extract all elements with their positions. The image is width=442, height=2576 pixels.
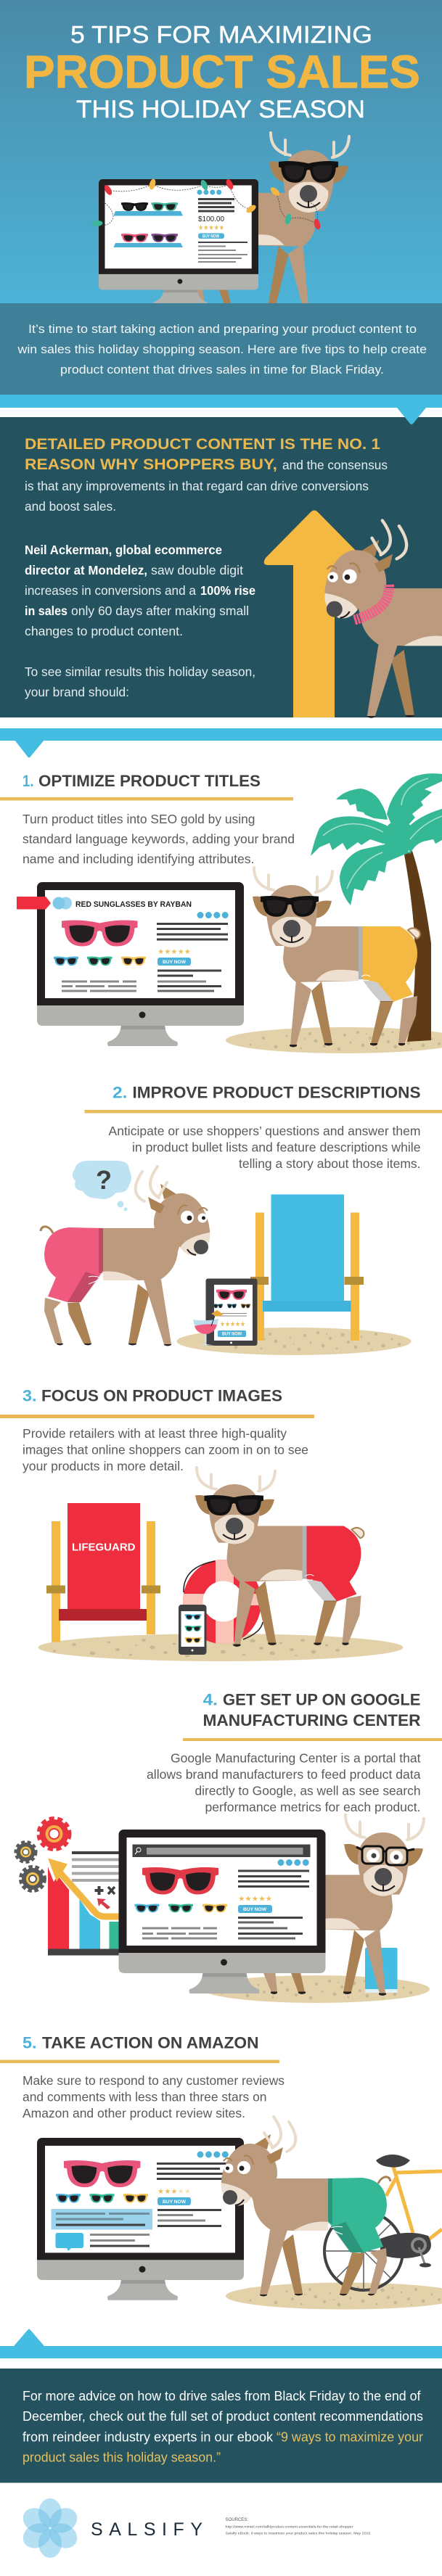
title bbox=[24, 22, 420, 123]
life ring bbox=[181, 1558, 263, 1645]
monitor with reviews page: BUY NOW bbox=[163, 2200, 187, 2205]
body text: Anticipate or use shoppers’ questions and answer them bbox=[109, 1124, 421, 1138]
intro text: product content that drives sales in time for Black Friday. bbox=[60, 363, 384, 376]
heading text: and boost sales. bbox=[25, 499, 116, 514]
red tag bbox=[17, 897, 51, 910]
monitor with title example: BUY NOW bbox=[163, 960, 187, 965]
body text bbox=[109, 1124, 421, 1171]
cocktail bbox=[193, 1310, 224, 1345]
section 1: optimize product titles bbox=[0, 772, 442, 1053]
heading: 2. bbox=[112, 1084, 128, 1101]
reindeer in red shorts with sunglasses bbox=[195, 1468, 364, 1647]
illustration: sand bbox=[38, 1634, 404, 1661]
heading: 4. bbox=[203, 1690, 218, 1709]
holiday lights bbox=[91, 178, 322, 230]
divider band with pointer bbox=[0, 728, 442, 757]
body text: Neil Ackerman: increases in conversions and a bbox=[25, 583, 196, 598]
sources: SOURCES: bbox=[225, 2517, 248, 2522]
heading: MANUFACTURING CENTER bbox=[203, 1711, 421, 1729]
body text: allows brand manufacturers to feed product data bbox=[147, 1767, 421, 1782]
reindeer with lei bbox=[324, 521, 442, 718]
reindeer in green shorts bbox=[221, 2117, 390, 2297]
body text: Neil Ackerman: only 60 days after making small bbox=[71, 604, 249, 618]
reindeer in yellow shorts with sunglasses bbox=[253, 868, 420, 1048]
body text: Neil Ackerman: 100% rise bbox=[200, 583, 255, 598]
body text: Turn product titles into SEO gold by using bbox=[22, 812, 255, 826]
illustration: palm tree bbox=[311, 773, 442, 1042]
body text: call to action: To see similar results this holiday season, bbox=[25, 664, 255, 679]
highlighted review bbox=[51, 2209, 152, 2230]
body text: Neil Ackerman bbox=[25, 543, 255, 638]
body text: Amazon and other product review sites. bbox=[22, 2106, 245, 2120]
sources bbox=[225, 2517, 371, 2535]
section 4: google manufacturing center bbox=[16, 1690, 442, 2003]
tablet: ★★★★★ bbox=[220, 1320, 245, 1329]
illustration: lifeguard chair bbox=[46, 1503, 160, 1642]
body text bbox=[22, 812, 295, 866]
intro text: It’s time to start taking action and preparing your product content to bbox=[28, 322, 417, 336]
closing text: from reindeer industry experts in our ebook bbox=[22, 2430, 274, 2445]
body text: Neil Ackerman: director at Mondelez, bbox=[25, 563, 147, 577]
closing text: “9 ways to maximize your bbox=[277, 2430, 423, 2445]
heading text: REASON WHY SHOPPERS BUY, bbox=[25, 456, 277, 473]
section 2: improve product descriptions bbox=[41, 1084, 442, 1355]
monitor with sunglasses shop: $100.00 bbox=[198, 215, 224, 223]
tablet bbox=[206, 1278, 257, 1346]
heading: 5. bbox=[22, 2034, 36, 2052]
title: THIS HOLIDAY SEASON bbox=[76, 96, 365, 123]
brand name: SALSIFY bbox=[91, 2519, 202, 2540]
illustration: sand bbox=[226, 1027, 442, 1053]
body text: Make sure to respond to any customer reviews bbox=[22, 2073, 285, 2088]
body text: call to action: your brand should: bbox=[25, 685, 129, 699]
reindeer in pink shorts bbox=[41, 1166, 210, 1346]
body text: call to action bbox=[25, 664, 255, 699]
body text: telling a story about those items. bbox=[239, 1156, 421, 1171]
heading: 3. bbox=[22, 1387, 36, 1404]
body text bbox=[147, 1751, 421, 1814]
illustration: lifeguard chair: LIFEGUARD bbox=[72, 1541, 136, 1554]
heading bbox=[203, 1690, 421, 1729]
panel: detailed product content bbox=[0, 408, 442, 718]
heading: IMPROVE PRODUCT DESCRIPTIONS bbox=[132, 1084, 421, 1101]
title: PRODUCT SALES bbox=[24, 46, 420, 98]
nerd glasses bbox=[356, 1846, 414, 1865]
gears bbox=[16, 1819, 70, 1890]
illustration: bicycle bbox=[324, 2155, 442, 2290]
heading text: is that any improvements in that regard can drive conversions bbox=[25, 479, 369, 493]
heading text: and the consensus bbox=[282, 458, 388, 472]
logo: Salsify flower bbox=[18, 2498, 82, 2558]
document lines bbox=[72, 1851, 119, 1882]
comment bubble bbox=[55, 2233, 83, 2251]
pointer triangle bbox=[397, 408, 426, 424]
reindeer with nerd glasses bbox=[255, 1815, 424, 1996]
title: 5 TIPS FOR MAXIMIZING bbox=[70, 22, 372, 49]
sources: Salsify eBook: 9 ways to maximize your product sales this holiday season, May 2015 bbox=[225, 2532, 371, 2535]
heading text: DETAILED PRODUCT CONTENT IS THE NO. 1 bbox=[25, 436, 380, 453]
star rating: ★★★★★ bbox=[157, 2188, 191, 2196]
body text: Provide retailers with at least three high-quality bbox=[22, 1426, 287, 1441]
divider band with pointer bbox=[0, 395, 442, 417]
body text: name and including identifying attributes. bbox=[22, 852, 254, 866]
closing text bbox=[22, 2389, 423, 2465]
intro text bbox=[17, 322, 427, 376]
illustration: thought cloud with question mark bbox=[73, 1161, 131, 1211]
body text: your products in more detail. bbox=[22, 1459, 184, 1473]
product title: RED SUNGLASSES BY RAYBAN bbox=[75, 900, 192, 909]
body text bbox=[22, 1426, 308, 1473]
monitor with search page bbox=[119, 1830, 325, 1993]
reindeer with sunglasses bbox=[184, 133, 349, 309]
panel: intro band bbox=[0, 303, 442, 395]
heading: GET SET UP ON GOOGLE bbox=[223, 1690, 421, 1709]
heading: OPTIMIZE PRODUCT TITLES bbox=[38, 772, 261, 790]
body text: in product bullet lists and feature descriptions while bbox=[132, 1140, 421, 1155]
illustration: reindeer in sunglasses beside monitor bbox=[91, 133, 349, 309]
panel: hero header bbox=[0, 0, 442, 309]
closing text: product sales this holiday season.” bbox=[22, 2451, 221, 2465]
monitor with sunglasses shop bbox=[99, 179, 258, 305]
monitor with search page: BUY NOW bbox=[243, 1907, 267, 1912]
intro text: win sales this holiday shopping season. Here are five tips to help create bbox=[17, 342, 427, 356]
illustration: sand bbox=[177, 1328, 411, 1355]
body text: Neil Ackerman: in sales bbox=[25, 604, 67, 618]
tablet: BUY NOW bbox=[222, 1332, 242, 1336]
section 5: take action on amazon bbox=[0, 2034, 442, 2310]
illustration: blue beach chair bbox=[250, 1194, 364, 1341]
closing band with pointer bbox=[0, 2329, 442, 2358]
heading text bbox=[25, 436, 388, 514]
closing text: For more advice on how to drive sales from Black Friday to the end of bbox=[22, 2389, 421, 2403]
body text: performance metrics for each product. bbox=[205, 1800, 421, 1814]
monitor with search page: ★★★★★ bbox=[238, 1895, 272, 1904]
monitor with title example bbox=[17, 882, 244, 1046]
body text: Neil Ackerman: saw double digit bbox=[151, 563, 243, 577]
body text: and comments with less than three stars on bbox=[22, 2089, 267, 2104]
body text: Neil Ackerman: Neil Ackerman, global ecommerce bbox=[25, 543, 222, 557]
monitor with reviews page bbox=[37, 2138, 244, 2300]
body text bbox=[22, 2073, 285, 2120]
section 3: focus on product images bbox=[0, 1387, 404, 1661]
footer bbox=[18, 2498, 371, 2558]
illustration: sand bbox=[203, 1975, 430, 2003]
heading: 1. bbox=[22, 772, 33, 790]
closing text: December, check out the full set of product content recommendations bbox=[22, 2409, 423, 2424]
illustration: sand bbox=[226, 2282, 442, 2310]
smartphone bbox=[179, 1605, 206, 1655]
illustration: blue notebook bbox=[365, 1948, 398, 1993]
body text: directly to Google, as well as see search bbox=[195, 1783, 421, 1798]
body text: Neil Ackerman: changes to product content. bbox=[25, 624, 183, 638]
heading: TAKE ACTION ON AMAZON bbox=[42, 2034, 258, 2052]
monitor with sunglasses shop: ★★★★★ bbox=[198, 224, 224, 232]
monitor with title example: ★★★★★ bbox=[157, 948, 191, 956]
panel: closing call to action bbox=[0, 2369, 442, 2482]
bar chart with arrow bbox=[48, 1859, 120, 1956]
arrow: upward growth bbox=[264, 511, 364, 717]
monitor with sunglasses shop: BUY NOW bbox=[202, 234, 220, 239]
sources: http://www.mintel.com/talk/product-content-essentials-for-the-retail-shopper bbox=[225, 2524, 353, 2529]
illustration: thought cloud with question mark: ? bbox=[96, 1165, 112, 1195]
body text: standard language keywords, adding your brand bbox=[22, 831, 295, 846]
heading: FOCUS ON PRODUCT IMAGES bbox=[41, 1387, 282, 1404]
body text: Google Manufacturing Center is a portal that bbox=[171, 1751, 421, 1766]
body text: images that online shoppers can zoom in on to see bbox=[22, 1442, 308, 1457]
